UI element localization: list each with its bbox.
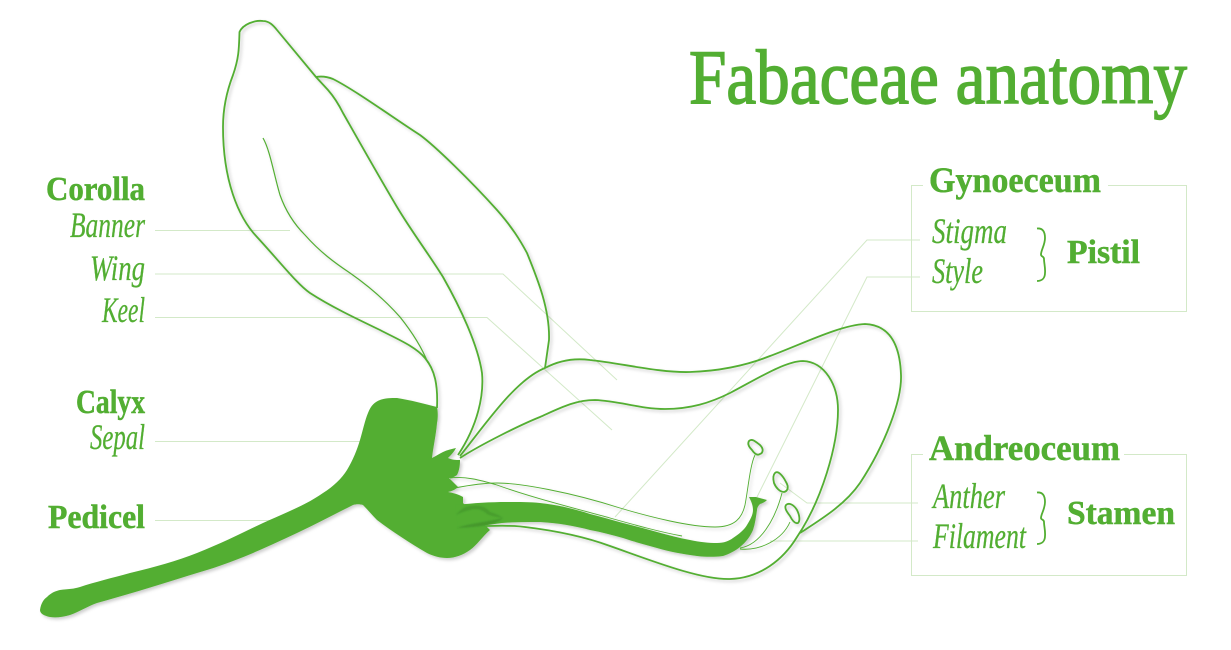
leader lines: [155, 230, 920, 541]
calyx and pedicel: [40, 398, 490, 617]
label: Banner: Banner: [70, 205, 146, 245]
label: Pedicel: Pedicel: [48, 499, 145, 536]
anther: lower: [785, 504, 799, 523]
calyx inner shadow detail: [456, 506, 503, 528]
label: Filament: Filament: [932, 516, 1027, 556]
label: Calyx: Calyx: [76, 384, 145, 421]
label: Anther: Anther: [932, 476, 1006, 516]
panel: gynoeceum: [912, 160, 1186, 312]
label: Wing: Wing: [90, 248, 145, 288]
label: Stigma: Stigma: [932, 211, 1007, 251]
label: Pistil: Pistil: [1067, 234, 1140, 271]
brace: [1037, 492, 1045, 544]
heading: Gynoeceum: Gynoeceum: [929, 160, 1101, 200]
pistil: style and stigma: [455, 497, 767, 557]
label: Corolla: Corolla: [46, 171, 145, 208]
heading: Andreoceum: Andreoceum: [929, 428, 1120, 468]
keel petal: [460, 361, 838, 579]
panel: andreoceum: [912, 428, 1186, 576]
brace: [1037, 228, 1045, 281]
panel frame: [912, 454, 1186, 576]
label: Stamen: Stamen: [1067, 495, 1175, 532]
stamen filaments: [450, 455, 790, 549]
label: Style: Style: [932, 251, 983, 291]
anther: top: [748, 440, 763, 455]
panel frame: [912, 186, 1186, 312]
anther: middle: [773, 472, 788, 492]
flower illustration: [40, 21, 901, 617]
label: Keel: Keel: [101, 290, 145, 330]
label: Sepal: Sepal: [90, 417, 145, 457]
wing petal: [460, 324, 901, 533]
banner petal: [223, 21, 482, 455]
banner inner fold: [263, 138, 428, 363]
wing petal upper edge: [316, 77, 549, 368]
